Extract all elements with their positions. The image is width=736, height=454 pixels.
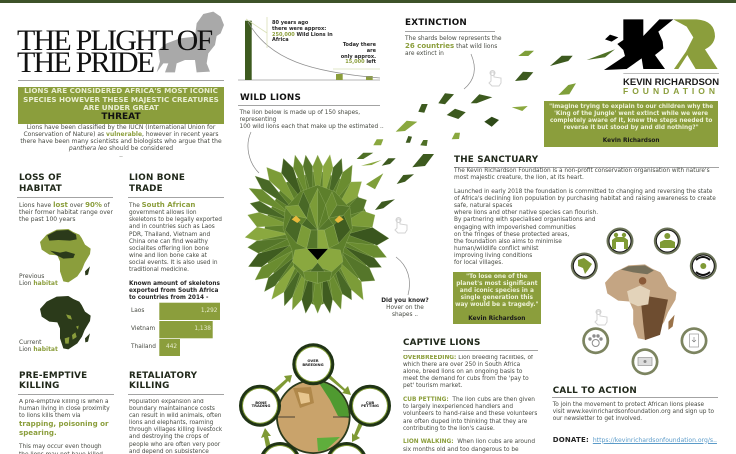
text: bone trade: and in countries such as Laos	[129, 224, 215, 230]
text: sanctuary body: engaging with impoverished communities	[454, 225, 576, 231]
quote box: sanctuary: Kevin Richardson	[468, 316, 525, 322]
did you know: Did you know?	[381, 298, 429, 304]
circle label: overbreeding: BREEDING	[302, 363, 324, 367]
quote box: reverse it but stood by and did nothing?"	[564, 125, 699, 131]
text: captive lions: contributing to the lion's cause.	[403, 426, 495, 432]
threat banner	[18, 87, 224, 124]
population chart	[238, 17, 380, 80]
quote box: sanctuary: planet's most significant	[456, 281, 537, 287]
did you know	[381, 298, 429, 318]
text: retaliatory: and destroying the crops of	[129, 434, 209, 440]
text: 80 years ago: Africa	[272, 37, 289, 43]
quote box: Kevin Richardson	[603, 138, 660, 144]
logo text	[623, 76, 719, 96]
chart title: Known amount of skeletons	[129, 281, 220, 287]
text: sanctuary body: for local villages.	[454, 260, 503, 266]
text: sanctuary body: Launched in early 2018 the foundation is committed to changing and reversing the state	[454, 189, 712, 195]
title: THE PLIGHT OF	[17, 24, 211, 57]
divider	[18, 394, 114, 395]
threat banner: LIONS ARE CONSIDERED AFRICA'S MOST ICONIC	[24, 86, 218, 95]
text: today: only approx.	[341, 54, 376, 60]
text: sanctuary body: safe, natural spaces	[454, 203, 512, 209]
label: previous habitat	[19, 273, 58, 287]
text: retaliatory: through villages killing livestock	[129, 427, 222, 433]
did you know: Hover on the	[386, 305, 424, 311]
text: bone trade: socialites offering lion bone	[129, 246, 209, 252]
divider	[128, 394, 224, 395]
text: loss of habitat: their former habitat range over	[19, 209, 113, 216]
arrow: did you know	[396, 257, 410, 295]
photo circle	[276, 379, 351, 454]
intro text: panthera leo should be considered	[69, 145, 173, 152]
text: wild lions: representing	[240, 117, 276, 123]
text: captive lions	[403, 355, 537, 453]
heading: wild lions: WILD LIONS	[240, 92, 301, 102]
text: today	[341, 42, 376, 65]
chart labels: Laos	[131, 308, 144, 314]
text: captive lions: to largely inexperienced handlers and	[403, 404, 513, 410]
icon: hands paw	[690, 252, 717, 280]
text: pre-emptive: spearing.	[19, 428, 57, 437]
text: captive lions: are often duped into thinking that they are	[403, 419, 527, 425]
quote box: sanctuary: way would be a tragedy."	[455, 302, 539, 308]
circle diagram	[239, 343, 391, 454]
circle: cub petting	[349, 385, 391, 427]
text: bone trade: traditional medicine.	[129, 267, 189, 273]
label: current habitat: Current	[19, 339, 42, 346]
text: captive lions: LION WALKING: When lion cubs are around	[403, 439, 535, 445]
text: sanctuary body: of Africa's declining lion population by purchasing habitat and raising awareness to create	[454, 196, 716, 202]
text: wild lions	[240, 110, 384, 130]
circle label: bone trading	[252, 400, 270, 408]
chart title: exported from South Africa	[129, 288, 218, 294]
label: previous habitat: Previous	[19, 273, 44, 280]
icon: money	[632, 348, 658, 375]
chart values: 442	[166, 344, 177, 350]
chart labels: Thailand	[131, 344, 156, 350]
title: THE PRIDE	[17, 46, 153, 78]
circle label: cub petting: PETTING	[361, 404, 379, 408]
text: retaliatory: boundary maintainance costs	[129, 406, 215, 412]
top bar	[0, 0, 736, 3]
circle label: cub petting	[361, 400, 379, 408]
intro text	[20, 124, 222, 159]
text: pre-emptive: A pre-emptive killing is when a	[19, 399, 109, 405]
text: bone trade: PDR, Thailand, Vietnam and	[129, 232, 210, 238]
title divider	[18, 80, 224, 81]
text: 80 years ago: 250,000 Wild Lions in	[272, 32, 333, 38]
divider	[17, 196, 113, 198]
text: today: 15,000 left	[345, 59, 376, 65]
did you know: shapes ..	[392, 312, 418, 318]
text: wild lions: The lion below is made up of 150 shapes,	[240, 110, 360, 116]
arrows	[261, 374, 364, 452]
circle label: overbreeding	[302, 359, 324, 367]
circle label: bone trading: TRADING	[252, 404, 270, 408]
heading: the sanctuary: THE SANCTUARY	[454, 155, 538, 165]
text: bone trade: government allows lion	[129, 210, 197, 216]
text: captive lions: pet' tourism market.	[403, 383, 462, 389]
text: 80 years ago: there were approx:	[272, 26, 326, 32]
shards	[357, 49, 615, 210]
bar chart	[159, 303, 220, 356]
circle label: overbreeding: OVER	[307, 359, 319, 363]
circle: overbreeding	[292, 343, 334, 385]
label: previous habitat: Lion habitat	[19, 280, 58, 287]
text: captive lions: alone, breed lions on an ongoing basis to	[403, 369, 522, 375]
divider	[405, 30, 495, 32]
lion made of shapes	[245, 155, 389, 313]
icon: paw	[582, 327, 609, 354]
icon: document	[680, 327, 708, 354]
text: sanctuary intro	[454, 168, 710, 181]
text: loss of habitat	[19, 201, 113, 223]
circle: lower right	[328, 442, 366, 454]
circle label: cub petting: CUB	[366, 400, 374, 404]
text: sanctuary intro: The Kevin Richardson Foundation is a non-profit conservation organisation with nature's	[454, 168, 710, 174]
heading: captive lions: CAPTIVE LIONS	[403, 338, 481, 348]
text: wild lions: 100 wild lions each that make up the estimated ..	[240, 124, 384, 130]
text: captive lions: CUB PETTING: The lion cubs are then given	[403, 397, 535, 403]
text: sanctuary body	[454, 188, 716, 266]
heading: lion bone trade: LION BONE	[129, 173, 185, 183]
heading: retaliatory killing: KILLING	[129, 381, 170, 391]
quote box: 'King of the Jungle' went extinct while we were	[554, 111, 708, 117]
label: current habitat	[19, 339, 58, 353]
donate: DONATE: https://kevinrichardsonfoundation.org/s..	[553, 436, 717, 444]
text: 80 years ago	[272, 20, 333, 43]
heading: lion bone trade	[129, 173, 185, 194]
intro text: there have been many scientists and biologists who argue that the	[20, 138, 222, 145]
circle: bone trading	[239, 385, 281, 427]
text: captive lions: volunteers to hand-raise and these volunteers	[403, 411, 537, 417]
text: bone trade: skeletons to be legally exported	[129, 217, 222, 223]
text: pre-emptive	[19, 399, 110, 454]
text: pre-emptive: trapping, poisoning or	[19, 419, 108, 428]
text: call to action: our newsletter to get involved.	[553, 416, 642, 422]
text: call to action: visit www.kevinrichardsonfoundation.org and sign up to	[553, 409, 714, 415]
quote box: completely aware of it, knew the steps needed to	[550, 118, 712, 124]
text: loss of habitat: Lions have lost over 90% of	[19, 201, 110, 209]
quote box: sanctuary: "To lose one of the	[466, 274, 528, 280]
heading: pre-emptive killing: KILLING	[19, 381, 60, 391]
text: call to action: To join the movement to protect African lions please	[553, 402, 704, 408]
heading: pre-emptive killing	[19, 370, 87, 391]
text: sanctuary body: on the fringes of these protected areas,	[454, 232, 569, 238]
divider	[128, 196, 224, 198]
text: retaliatory: Population expansion and	[129, 399, 204, 405]
text: pre-emptive: This may occur even though	[19, 444, 102, 450]
divider	[403, 350, 538, 351]
text: loss of habitat: the past 100 years	[19, 216, 76, 223]
quote box: sanctuary	[453, 272, 541, 324]
intro text: ..	[119, 152, 123, 159]
icon: people	[606, 228, 634, 254]
icon: hand sanctuary	[595, 310, 607, 325]
chart values: 1,292	[201, 308, 218, 314]
logo	[604, 19, 719, 74]
text: sanctuary body: improving living conditions	[454, 253, 532, 259]
heading: loss of habitat: LOSS OF	[19, 173, 62, 183]
text: call to action	[552, 402, 714, 422]
text: captive lions: meet the demand for cubs from the 'pay to	[403, 376, 529, 382]
text: captive lions: OVERBREEDING: Lion breeding facilities, of	[403, 355, 533, 361]
text: bone trade: The South African	[129, 201, 195, 209]
divider	[454, 167, 719, 168]
quote box: "Imagine trying to explain to our children why the	[549, 104, 713, 110]
chart title: to countries from 2014 -	[129, 295, 208, 301]
threat banner: SPECIES HOWEVER THESE MAJESTIC CREATURES	[23, 95, 219, 104]
map: previous lion habitat	[40, 229, 91, 282]
text: extinction: are extinct in	[405, 51, 444, 57]
text: sanctuary body: where lions and other native species can flourish.	[454, 210, 598, 216]
map: current lion habitat	[40, 296, 91, 349]
heading: pre-emptive killing: PRE-EMPTIVE	[19, 370, 87, 380]
text: 80 years ago: 80 years ago	[272, 20, 308, 26]
sanctuary africa photo	[605, 264, 676, 340]
chart title	[129, 280, 220, 301]
quote box: sanctuary: and iconic species in a	[460, 288, 534, 294]
intro text: Conservation of Nature) as vulnerable, however in recent years	[23, 131, 219, 138]
arrow: extinction	[464, 54, 474, 89]
text: extinction	[405, 35, 502, 57]
text: extinction: 26 countries that wild lions	[405, 42, 497, 50]
text: retaliatory	[129, 399, 222, 454]
arrow: wild lions	[248, 132, 259, 173]
quote box	[544, 101, 718, 147]
text: bone trade: social events. It is also used in	[129, 260, 218, 266]
lion silhouette	[157, 12, 224, 72]
threat banner: ARE UNDER GREAT	[83, 103, 159, 112]
divider	[238, 104, 380, 106]
text: today: are	[367, 48, 376, 54]
icon: hand lion	[395, 218, 407, 233]
heading: loss of habitat	[19, 173, 62, 194]
text: captive lions: which there are over 250 in South Africa	[403, 362, 520, 368]
label: current habitat: Lion habitat	[19, 346, 58, 353]
circle label: bone trading: BONE	[255, 400, 267, 404]
intro text: Lions have been classified by the IUCN (International Union for	[27, 124, 215, 130]
heading: extinction: EXTINCTION	[405, 18, 467, 28]
sanctuary icons	[571, 228, 717, 375]
divider	[552, 397, 718, 398]
title	[17, 24, 212, 78]
text: retaliatory: can result in wild animals, often	[129, 413, 221, 419]
chart labels: Vietnam	[131, 326, 155, 332]
icon: africa	[571, 252, 598, 280]
icon: hand extinction	[489, 70, 501, 86]
text: sanctuary body: human/wildlife conflict whilst	[454, 246, 538, 252]
chart labels	[131, 308, 156, 350]
chart values	[166, 308, 218, 350]
heading: lion bone trade: TRADE	[129, 184, 163, 194]
quote box: sanctuary: single generation this	[461, 295, 533, 301]
text: pre-emptive: human living in close proximity	[19, 406, 110, 412]
text: bone trade	[129, 201, 222, 273]
threat banner: THREAT	[101, 112, 141, 122]
circle: lower left	[261, 442, 299, 454]
text: sanctuary body: By partnering with specialised organisations and	[454, 217, 595, 223]
text: extinction: The shards below represents the	[405, 36, 501, 42]
text: today: Today there	[343, 42, 376, 48]
logo text: KEVIN RICHARDSON	[623, 76, 719, 88]
text: retaliatory: people who are often very poor	[129, 442, 220, 448]
text: sanctuary intro: most majestic creature, the lion, at its heart.	[454, 175, 584, 181]
heading: retaliatory killing	[129, 370, 197, 391]
chart values: 1,138	[194, 326, 211, 332]
text: captive lions: six months old and too dangerous to be	[403, 447, 519, 453]
text: sanctuary body: the foundation also aims to minimise	[454, 239, 562, 245]
heading: retaliatory killing: RETALIATORY	[129, 370, 197, 380]
heading: call to action: CALL TO ACTION	[553, 386, 637, 396]
text: retaliatory: lions and elephants, roaming	[129, 420, 213, 426]
text: bone trade: China one can find wealthy	[129, 239, 208, 245]
text: bone trade: wine and lion bone cake at	[129, 253, 207, 259]
icon: reading	[654, 228, 681, 254]
heading: loss of habitat: HABITAT	[19, 184, 62, 194]
logo text: FOUNDATION	[623, 86, 719, 96]
text: pre-emptive: to lions kills them via	[19, 413, 81, 419]
